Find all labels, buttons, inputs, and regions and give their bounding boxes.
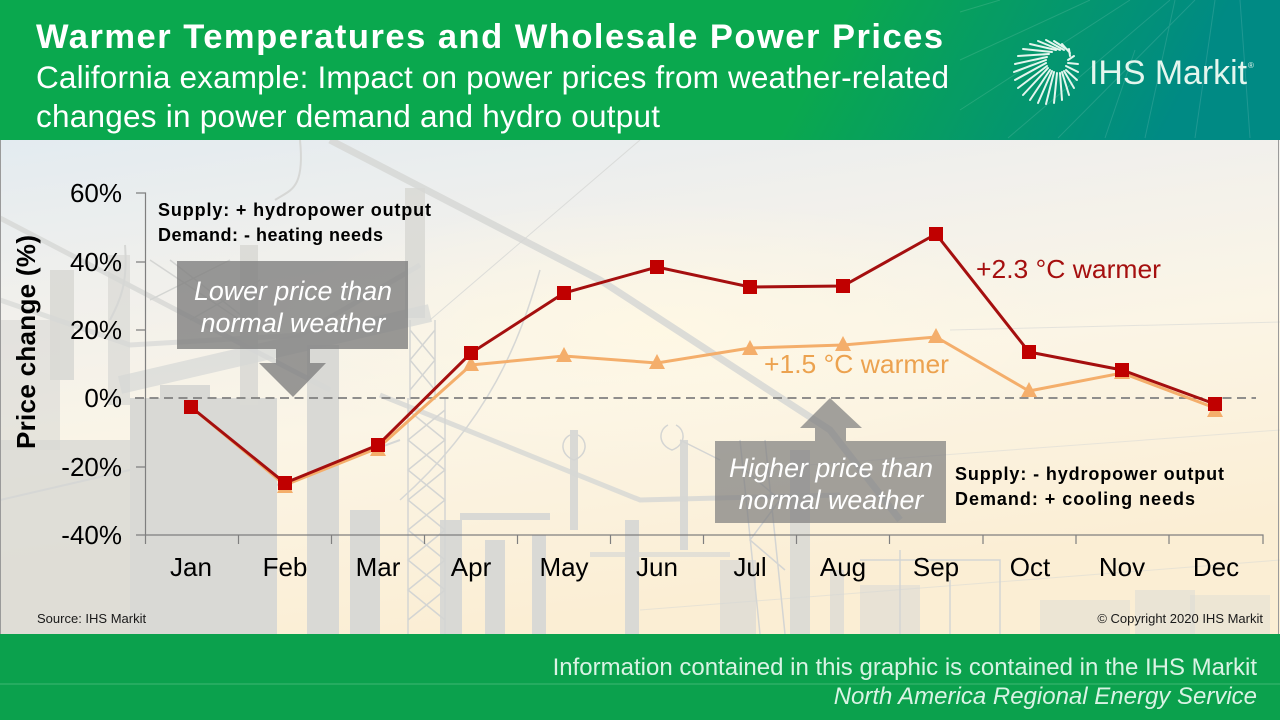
series: +1.5 °C warmer	[191, 328, 1223, 493]
header band	[0, 0, 1280, 140]
axes	[136, 193, 1263, 544]
note: supply and demand, warmer months: Supply: - hydropower output	[955, 464, 1224, 484]
callout: higher price than normal weather	[715, 398, 946, 523]
note: supply and demand, cooler months	[158, 200, 431, 245]
note: supply and demand, warmer months: Demand: + cooling needs	[955, 489, 1195, 509]
y axis tick labels: 60%	[70, 178, 122, 208]
subtitle: California example: Impact on power prices from weather-related	[36, 59, 949, 95]
panel: photo background of electrical substation	[0, 140, 1280, 634]
y axis tick labels: -20%	[61, 452, 122, 482]
subtitle	[36, 59, 949, 134]
month labels: Jan	[170, 552, 212, 582]
copyright note: © Copyright 2020 IHS Markit	[1097, 611, 1263, 626]
month labels: Oct	[1010, 552, 1051, 582]
month labels: Nov	[1099, 552, 1145, 582]
logo: IHS Markit: ®	[1248, 61, 1254, 70]
month labels: Aug	[820, 552, 866, 582]
title: Warmer Temperatures and Wholesale Power Prices	[36, 18, 943, 56]
month labels: Jul	[733, 552, 767, 582]
callout: higher price than normal weather: Higher price than	[729, 453, 933, 483]
y axis tick labels	[61, 178, 122, 550]
footer band: Information contained in this graphic is contained in the IHS Markit	[553, 654, 1257, 681]
y axis tick labels: 0%	[84, 383, 122, 413]
callout: lower price than normal weather: Lower price than	[194, 276, 392, 306]
subtitle: changes in power demand and hydro output	[36, 98, 660, 134]
series label: +2.3 °C warmer: +2.3 °C warmer	[976, 254, 1161, 284]
logo: IHS Markit: IHS Markit	[1089, 54, 1248, 92]
month labels: Apr	[451, 552, 492, 582]
callout: lower price than normal weather: normal weather	[201, 308, 386, 338]
callout: lower price than normal weather	[177, 261, 408, 397]
month labels: Feb	[263, 552, 307, 582]
month labels: May	[539, 552, 589, 582]
note: supply and demand, cooler months: Supply: + hydropower output	[158, 200, 431, 220]
callout: higher price than normal weather: normal weather	[739, 485, 924, 515]
note: supply and demand, cooler months: Demand: - heating needs	[158, 225, 383, 245]
zero line	[135, 397, 1256, 399]
y axis tick labels: 20%	[70, 315, 122, 345]
line chart: price change by month	[11, 178, 1263, 582]
y axis tick labels: -40%	[61, 520, 122, 550]
footer band: North America Regional Energy Service	[834, 683, 1257, 710]
logo: IHS Markit	[1014, 40, 1254, 104]
source note: Source: IHS Markit	[37, 611, 146, 626]
series: +2.3 °C warmer	[184, 227, 1222, 490]
y axis tick labels: 40%	[70, 247, 122, 277]
note: supply and demand, warmer months	[955, 464, 1224, 509]
month labels: Jun	[636, 552, 678, 582]
series label: +1.5 °C warmer: +1.5 °C warmer	[764, 349, 949, 379]
month labels: Dec	[1193, 552, 1239, 582]
month labels: Mar	[356, 552, 401, 582]
month labels	[170, 552, 1239, 582]
month labels: Sep	[913, 552, 959, 582]
footer band	[0, 634, 1280, 720]
y axis title: Price change (%)	[11, 235, 41, 449]
